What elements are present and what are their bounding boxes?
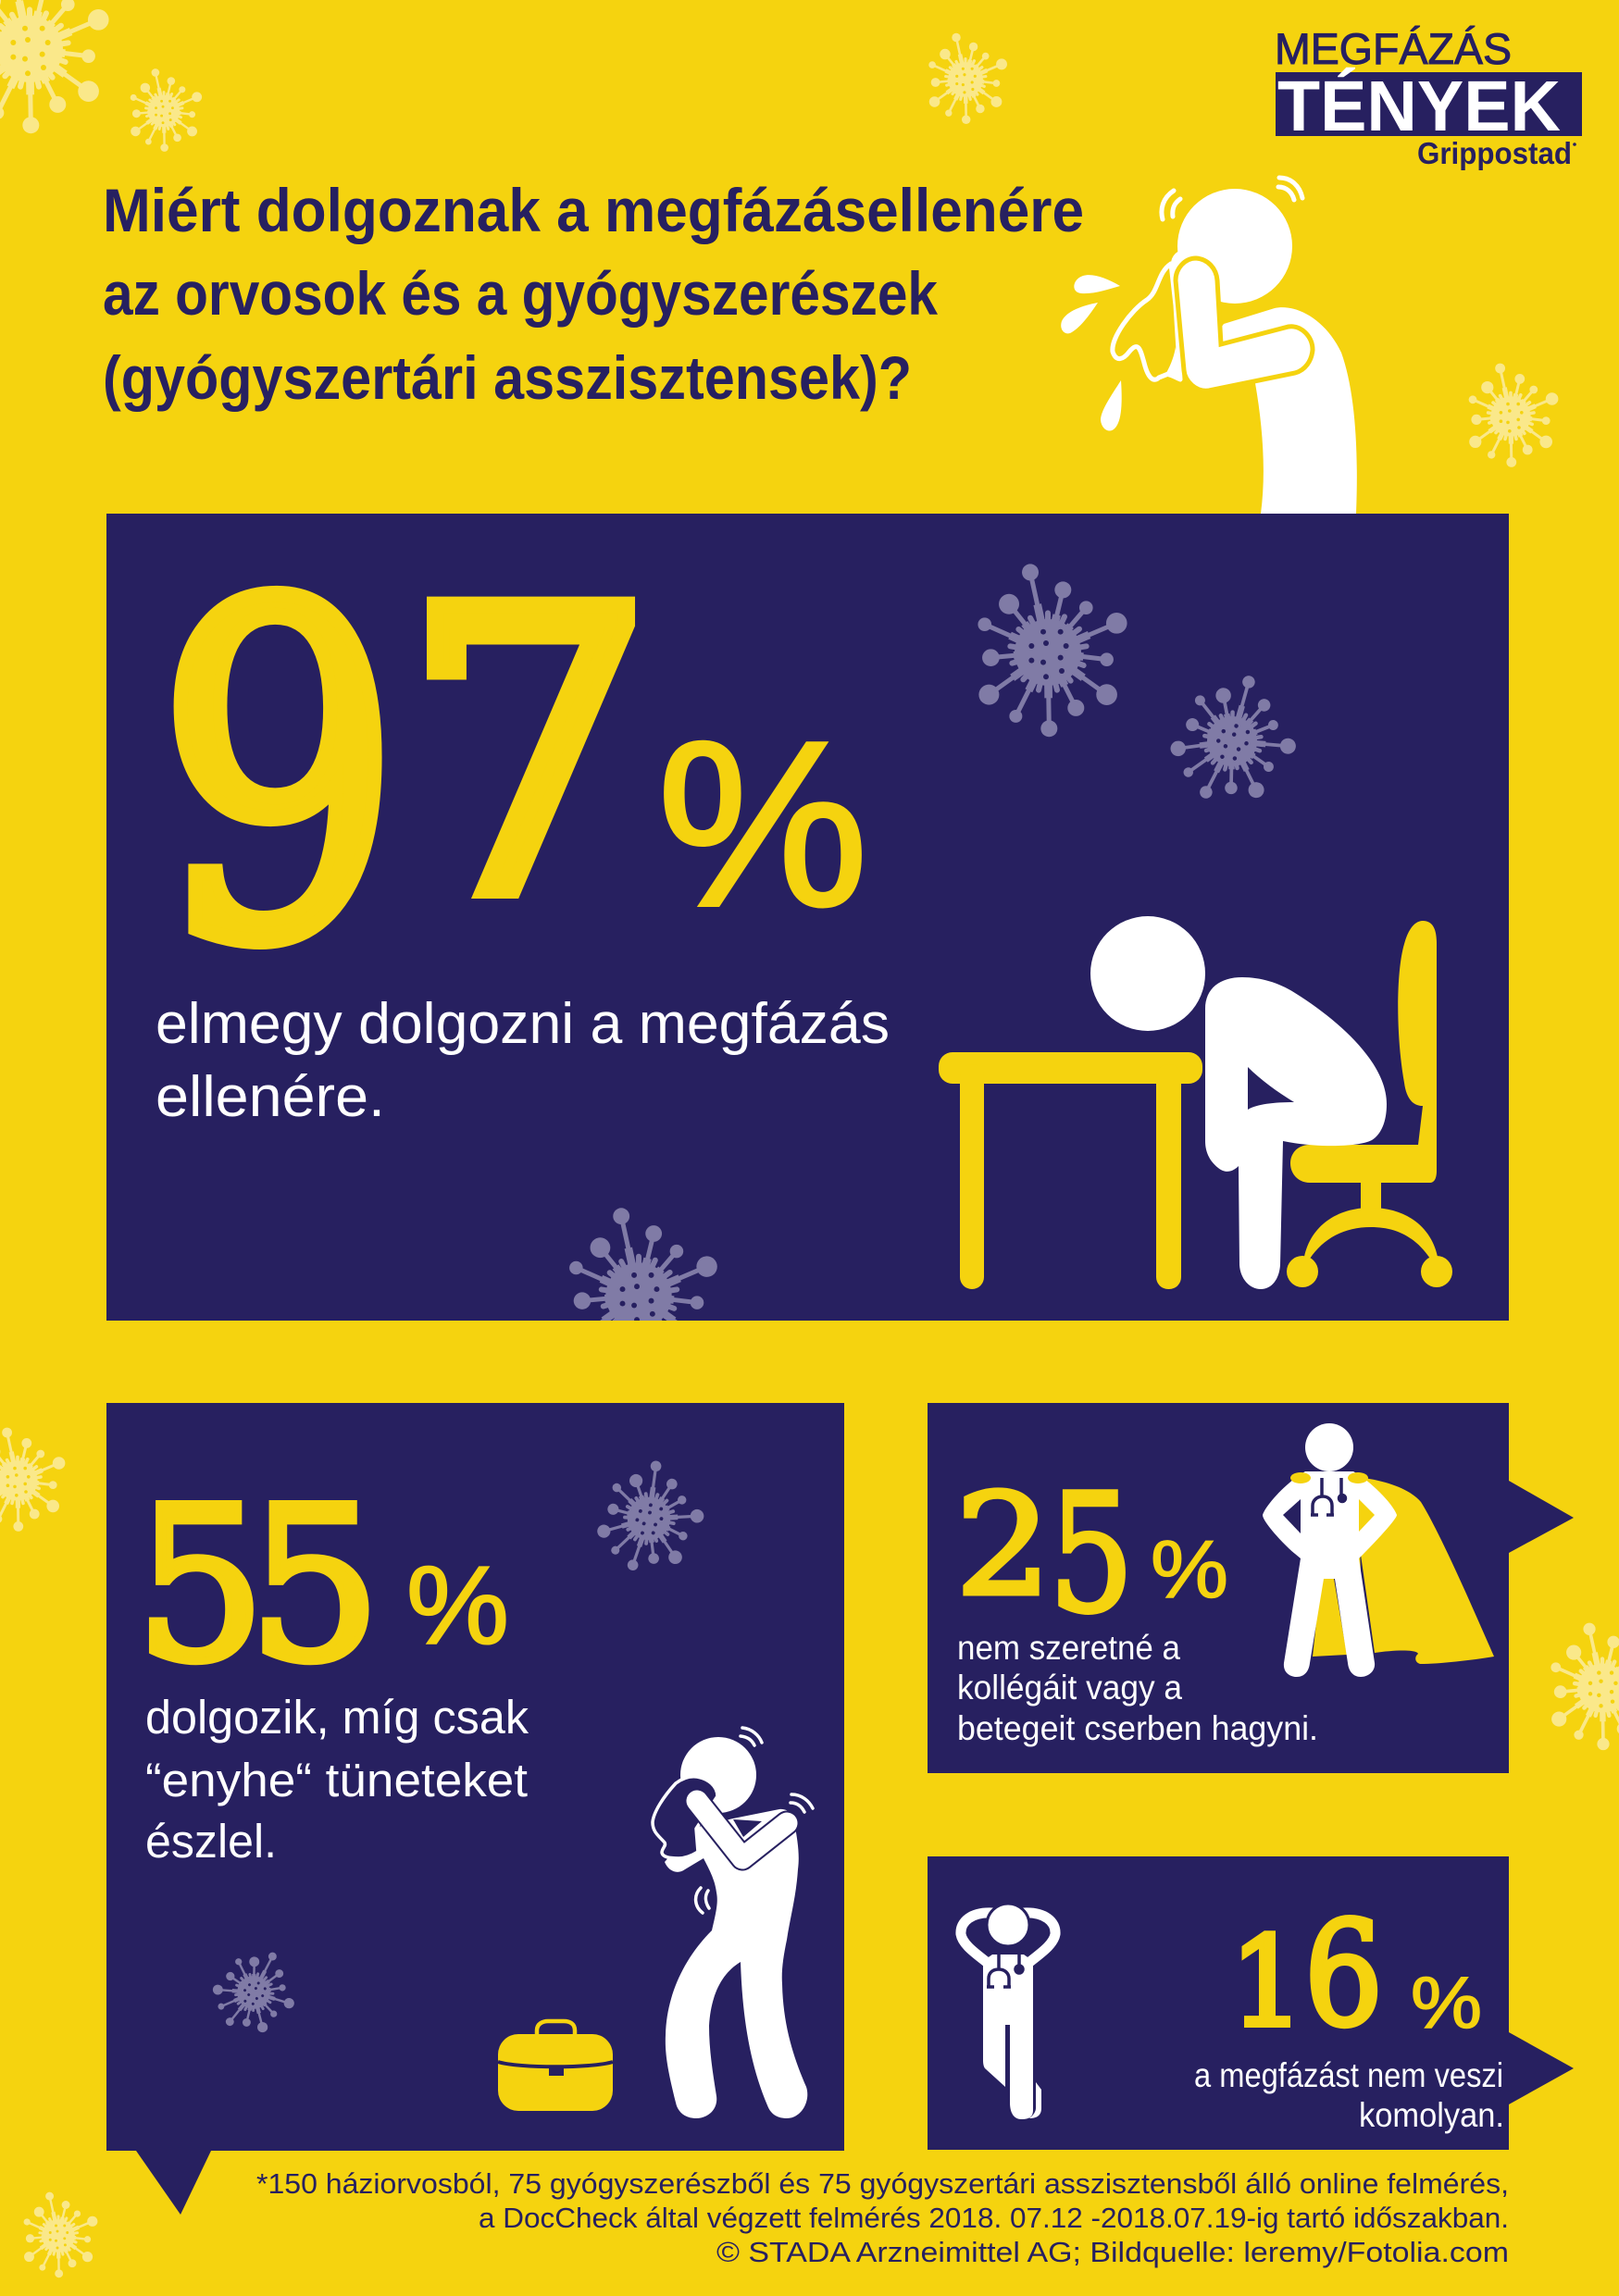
motion lines bbox=[696, 1728, 813, 1913]
percent sign: % bbox=[657, 692, 868, 955]
digit 5 second: 5 bbox=[248, 1462, 381, 1709]
number: 97 bbox=[156, 509, 655, 1043]
line 3: betegeit cserben hagyni. bbox=[957, 1709, 1318, 1747]
icon: relaxed doctor bbox=[961, 1904, 1055, 2119]
line 3: észlel. bbox=[145, 1815, 277, 1868]
line 1: a megfázást nem veszi bbox=[1194, 2056, 1503, 2094]
virus: left margin bbox=[0, 1428, 65, 1532]
icon: doctor superhero bbox=[1263, 1423, 1494, 1677]
virus: medium bbox=[1156, 658, 1315, 825]
virus: right of sneezing figure bbox=[1469, 364, 1558, 467]
line 1: nem szeretné a bbox=[957, 1629, 1180, 1667]
body bbox=[1205, 977, 1387, 1289]
lid line bbox=[498, 2062, 613, 2066]
arm bbox=[697, 1801, 787, 1858]
head bbox=[1090, 916, 1205, 1031]
logo: Megfázás Tények Grippostad bbox=[1275, 24, 1582, 170]
percent sign: % bbox=[406, 1544, 509, 1668]
footnote line 3: © STADA Arzneimittel AG; Bildquelle: leremy/Fotolia.com bbox=[716, 2236, 1509, 2268]
arms bbox=[961, 1913, 1055, 1964]
footnote line 2: a DocCheck által végzett felmérés 2018. 07.12 -2018.07.19-ig tartó időszakban. bbox=[479, 2202, 1509, 2234]
logo line: TÉNYEK: TÉNYEK bbox=[1277, 67, 1561, 146]
right arm gap bbox=[1359, 1499, 1375, 1532]
body bbox=[983, 1955, 1033, 2119]
title line 1: Miért dolgoznak a megfázásellenére bbox=[103, 176, 1084, 244]
cape bbox=[1313, 1477, 1494, 1664]
panel background with tail bbox=[106, 1403, 844, 2215]
percent sign: % bbox=[1151, 1523, 1228, 1615]
title line 3: (gyógyszertári asszisztensek)? bbox=[103, 343, 912, 412]
icon: aching person bbox=[653, 1728, 813, 2118]
droplet 1 bbox=[1074, 275, 1120, 293]
virus: top centre bbox=[928, 33, 1007, 124]
number: 55 bbox=[135, 1462, 381, 1709]
chair bbox=[1287, 921, 1452, 1287]
logo registered mark bbox=[1573, 143, 1576, 146]
logo brand: Grippostad: Grippostad bbox=[1417, 136, 1572, 170]
title bbox=[103, 176, 1084, 412]
stethoscope bbox=[1311, 1478, 1346, 1515]
line 2: kollégáit vagy a bbox=[957, 1669, 1182, 1706]
logo line: MEGFÁZÁS: MEGFÁZÁS bbox=[1275, 24, 1512, 73]
stethoscope bbox=[987, 1951, 1023, 1987]
panel background with tail bbox=[928, 1403, 1574, 1773]
icon: slumped person at desk bbox=[939, 916, 1452, 1289]
handle bbox=[537, 2021, 575, 2036]
epaulette right bbox=[1348, 1472, 1368, 1483]
panel: 55 percent bbox=[106, 1403, 844, 2215]
virus: bottom cropped bbox=[569, 1208, 717, 1321]
handkerchief bbox=[1113, 264, 1180, 379]
number: 16 bbox=[1230, 1891, 1383, 2058]
head bbox=[1305, 1423, 1353, 1471]
body and legs bbox=[665, 1809, 807, 2118]
handkerchief bbox=[653, 1777, 717, 1858]
left arm gap bbox=[1283, 1499, 1301, 1533]
virus: bottom left bbox=[24, 2192, 97, 2277]
body fill above elbow bbox=[754, 1819, 794, 1855]
digit 5 first: 5 bbox=[135, 1462, 266, 1709]
digit 5: 5 bbox=[1049, 1459, 1134, 1649]
text block bbox=[1194, 2056, 1504, 2134]
panel background bbox=[106, 514, 1509, 1321]
number: 25 bbox=[955, 1459, 1134, 1649]
motion lines bbox=[1162, 178, 1302, 219]
torso bbox=[1203, 307, 1357, 514]
line 1: dolgozik, míg csak bbox=[145, 1691, 529, 1744]
digit 6: 6 bbox=[1304, 1891, 1383, 2058]
digit 7: 7 bbox=[402, 527, 655, 983]
virus: top left large bbox=[0, 0, 109, 133]
arm outline lower edge bbox=[697, 1801, 787, 1858]
line 2: “enyhe“ tüneteket bbox=[145, 1754, 528, 1806]
panel: 25 percent bbox=[928, 1403, 1574, 1773]
clasp bbox=[549, 2066, 564, 2076]
digit 1: 1 bbox=[1230, 1912, 1304, 2054]
tissue corner bbox=[1164, 347, 1180, 380]
title line 2: az orvosok és a gyógyszerészek bbox=[103, 259, 938, 328]
panel: 16 percent bbox=[928, 1856, 1574, 2150]
virus: right margin bbox=[1551, 1623, 1619, 1750]
navy notch bbox=[733, 1819, 762, 1837]
head bbox=[680, 1737, 756, 1813]
head bbox=[1177, 189, 1292, 304]
head bbox=[987, 1904, 1029, 1946]
droplet 3 bbox=[1101, 380, 1122, 431]
line 2: ellenére. bbox=[156, 1065, 385, 1129]
percent sign: % bbox=[1411, 1961, 1482, 2043]
raised foot bbox=[1029, 2082, 1041, 2118]
panel background with tail bbox=[928, 1856, 1574, 2150]
text block bbox=[145, 1691, 529, 1868]
line 1: elmegy dolgozni a megfázás bbox=[156, 992, 890, 1056]
digit 2: 2 bbox=[955, 1464, 1052, 1627]
droplet 2 bbox=[1061, 303, 1098, 333]
line 2: komolyan. bbox=[1359, 2096, 1504, 2134]
text block bbox=[156, 992, 890, 1129]
virus: large bbox=[978, 564, 1127, 737]
virus: upper bbox=[588, 1449, 716, 1587]
virus: lower bbox=[200, 1937, 312, 2050]
panel: 97 percent bbox=[106, 509, 1509, 1379]
virus: top left small bbox=[131, 68, 202, 152]
text block bbox=[957, 1629, 1318, 1747]
case bbox=[498, 2034, 613, 2111]
digit 9: 9 bbox=[156, 509, 401, 1043]
icon: briefcase bbox=[498, 2021, 613, 2111]
icon: sneezing person bbox=[1061, 178, 1357, 514]
logo bar bbox=[1276, 72, 1582, 136]
footnote line 1: *150 háziorvosból, 75 gyógyszerészből és 75 gyógyszertári asszisztensből álló online felmérés, bbox=[256, 2167, 1509, 2200]
arm bbox=[1176, 258, 1313, 391]
footnote bbox=[256, 2167, 1509, 2268]
table bbox=[939, 1052, 1202, 1289]
nose bump bbox=[1171, 250, 1199, 278]
body bbox=[1263, 1471, 1397, 1677]
epaulette left bbox=[1290, 1472, 1311, 1483]
